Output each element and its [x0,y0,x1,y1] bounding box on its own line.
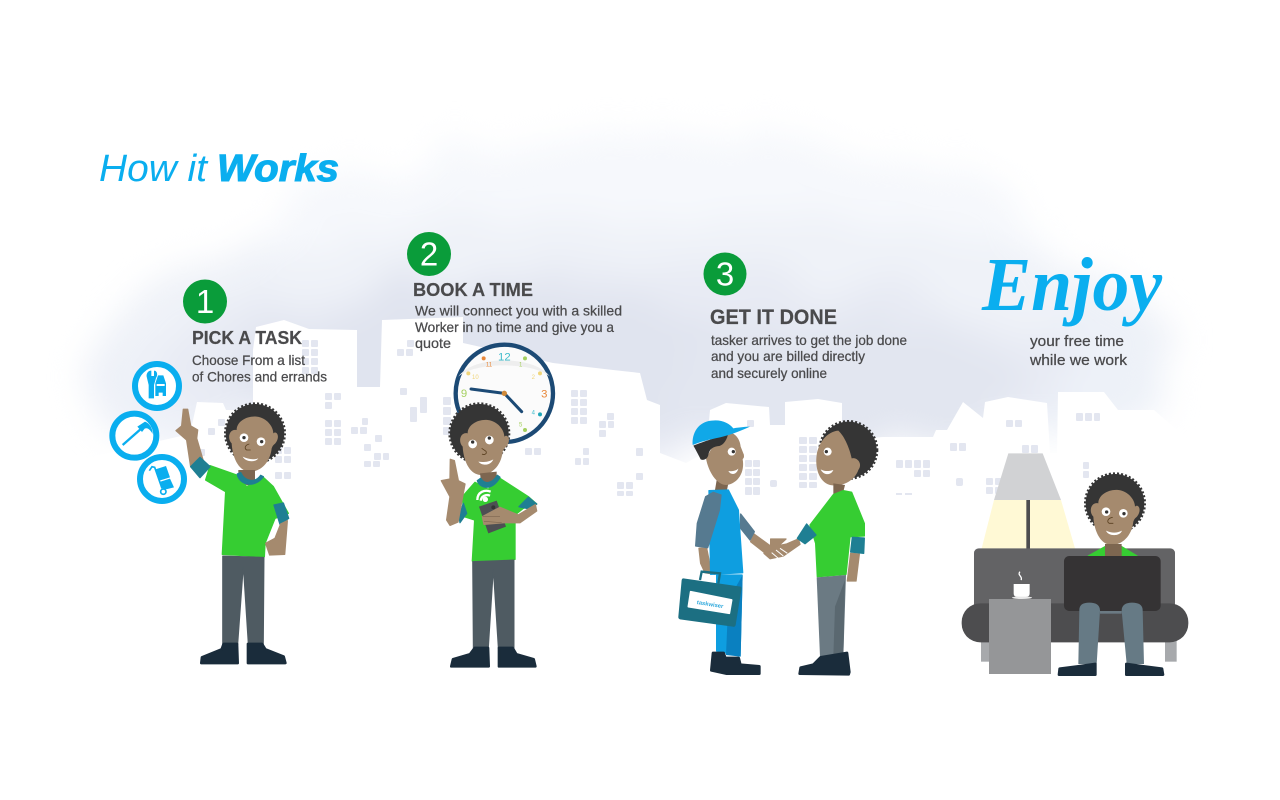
description: book a time [415,302,622,351]
building windows [198,340,1100,496]
wall clock: 9 [461,388,467,400]
heading: pick a task: PICK A TASK [192,327,303,348]
worker figure with phone [441,404,537,666]
wall clock [456,345,553,442]
wall clock: 12 [498,352,511,364]
icon: car repair [135,364,179,408]
scene 3: handshake between worker and customer [678,420,877,674]
number badge 3: 3 [716,256,734,292]
description: enjoy [1029,334,1128,369]
enjoy text block [981,243,1162,369]
description: pick a task: Choose From a list [192,352,305,368]
title: How it Works: Works [217,148,339,190]
wall clock: 2 [532,375,536,381]
description: enjoy: your free time [1030,334,1124,350]
number badge 3 [704,252,746,296]
description: get it done: tasker arrives to get the job done [711,332,907,348]
title: How it Works [99,148,339,190]
description: enjoy: while we work [1029,353,1128,369]
step 1 text block [183,280,327,384]
scene 1: worker picking a task [112,364,289,663]
sofa [962,548,1188,662]
description: book a time: quote [415,335,451,351]
scene 2: clock and worker with phone [441,345,553,666]
wall clock: 4 [532,410,536,416]
description: book a time: We will connect you with a skilled [415,302,622,318]
background: watercolor cloud [75,135,1180,465]
heading: book a time: BOOK A TIME [413,279,533,300]
wall clock: 1 [519,362,523,368]
number badge 2 [407,232,451,276]
description: get it done: and you are billed directly [711,348,865,364]
number badge 1: 1 [196,283,214,320]
wall clock: 5 [519,422,523,428]
worker figure pointing up [176,404,289,663]
step 3 text block [704,252,907,381]
scene 4: relaxing on the sofa [962,453,1188,675]
description: book a time: Worker in no time and give you a [415,319,614,335]
description: pick a task [192,352,327,384]
tasker figure with cap and bag [678,420,776,674]
number badge 1 [183,280,227,324]
tasker figure with cap and bag: taskwiser [696,600,724,610]
customer figure in green shirt [764,422,877,674]
icon: hammer [112,414,156,458]
description: pick a task: of Chores and errands [192,368,327,384]
wall clock: 10 [472,375,479,381]
description: get it done: and securely online [711,365,827,381]
heading: get it done: GET IT DONE [710,306,837,329]
side table with coffee cup [989,572,1051,674]
person with laptop [1059,474,1163,675]
skyline: white city silhouette [0,317,1280,800]
icon: hand cart [140,457,184,501]
wall clock: 11 [486,362,493,368]
step 2 text block [407,232,622,351]
floor lamp [982,453,1075,550]
wall clock: 3 [541,389,547,401]
title: How it Works: How it [99,148,208,190]
number badge 2: 2 [420,236,438,272]
description: get it done [711,332,907,381]
heading: Enjoy: Enjoy [981,243,1162,327]
